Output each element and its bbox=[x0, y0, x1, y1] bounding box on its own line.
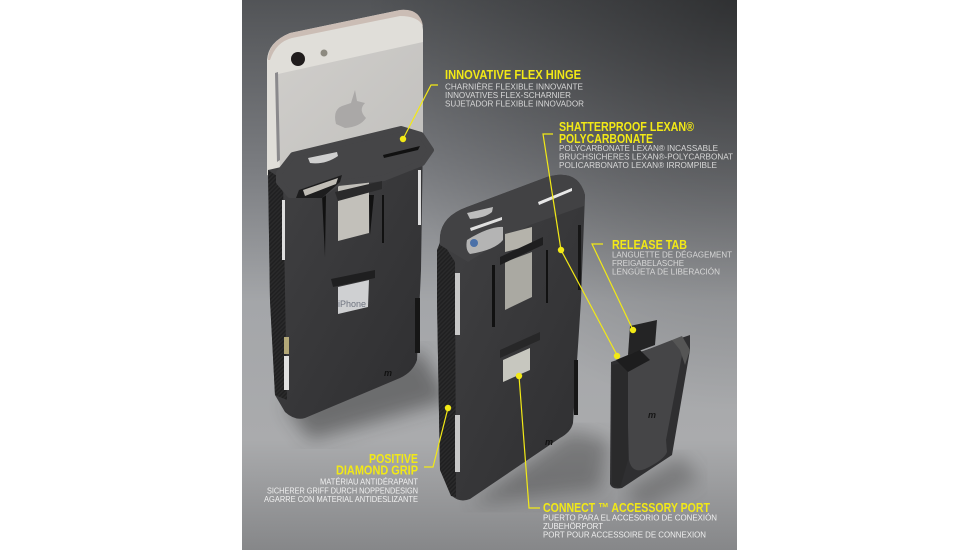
label: shatterproof lexan polycarbonate: POLYCARBONATE LEXAN® INCASSABLE bbox=[559, 143, 718, 153]
callout lines bbox=[403, 85, 633, 508]
product: phone in open case: iPhone bbox=[338, 299, 366, 309]
label: release tab: LENGÜETA DE LIBERACIÓN bbox=[612, 266, 720, 276]
label: shatterproof lexan polycarbonate: BRUCHSICHERES LEXAN®-POLYCARBONAT bbox=[559, 152, 733, 162]
product: phone in open case bbox=[267, 10, 450, 440]
label: innovative flex hinge bbox=[445, 67, 584, 108]
label: positive diamond grip: MATÉRIAU ANTIDÉRAPANT bbox=[320, 476, 418, 486]
label: release tab: RELEASE TAB bbox=[612, 237, 687, 252]
label: shatterproof lexan polycarbonate: POLICARBONATO LEXAN® IRROMPIBLE bbox=[559, 160, 717, 170]
label: innovative flex hinge: SUJETADOR FLEXIBLE INNOVADOR bbox=[445, 98, 584, 108]
camera opening bbox=[466, 227, 503, 254]
product: belt clip bbox=[610, 320, 700, 510]
label: shatterproof lexan polycarbonate: POLYCARBONATE bbox=[559, 131, 653, 146]
product: belt clip: m bbox=[648, 410, 656, 420]
label: positive diamond grip: POSITIVE bbox=[369, 451, 418, 466]
label: connect accessory port bbox=[543, 500, 717, 540]
case body bbox=[268, 135, 423, 419]
label: connect accessory port: PUERTO PARA EL ACCESORIO DE CONEXIÓN bbox=[543, 512, 717, 522]
label: connect accessory port: ZUBEHÖRPORT bbox=[543, 521, 603, 531]
label: positive diamond grip: SICHERER GRIFF DURCH NOPPENDESIGN bbox=[267, 486, 418, 496]
phone top bbox=[267, 10, 423, 180]
label: positive diamond grip bbox=[264, 451, 418, 504]
label: innovative flex hinge: CHARNIÈRE FLEXIBLE INNOVANTE bbox=[445, 82, 583, 92]
label: release tab: LANGUETTE DE DÉGAGEMENT bbox=[612, 250, 732, 260]
label: shatterproof lexan polycarbonate bbox=[559, 119, 733, 170]
label: positive diamond grip: AGARRE CON MATERIAL ANTIDESLIZANTE bbox=[264, 494, 418, 504]
product: phone in closed case bbox=[437, 175, 610, 505]
background panel bbox=[242, 0, 737, 550]
callout dots bbox=[400, 136, 636, 411]
windows bbox=[338, 174, 369, 241]
label: shatterproof lexan polycarbonate: SHATTERPROOF LEXAN® bbox=[559, 119, 694, 134]
label: release tab bbox=[612, 237, 732, 276]
label: innovative flex hinge: INNOVATIVE FLEX HINGE bbox=[445, 67, 581, 82]
label: positive diamond grip: DIAMOND GRIP bbox=[336, 462, 418, 478]
label: connect accessory port: PORT POUR ACCESSOIRE DE CONNEXION bbox=[543, 530, 706, 540]
label: innovative flex hinge: INNOVATIVES FLEX-SCHARNIER bbox=[445, 90, 571, 100]
label: release tab: FREIGABELASCHE bbox=[612, 258, 684, 268]
product: phone in closed case: m bbox=[545, 437, 553, 447]
label: connect accessory port: CONNECT ™ ACCESSORY PORT bbox=[543, 500, 710, 515]
product: phone in open case: m bbox=[384, 368, 392, 378]
hinge bbox=[279, 129, 431, 195]
